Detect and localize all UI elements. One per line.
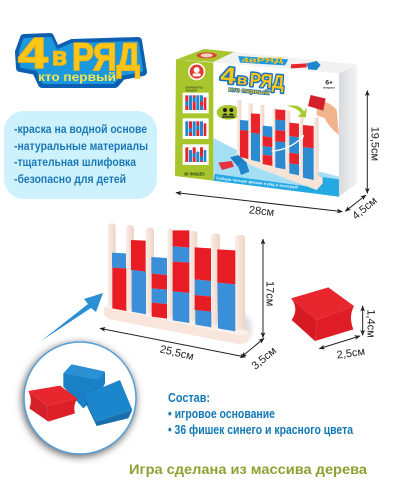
box logo: 4 <box>219 62 237 89</box>
text: features list <box>14 122 148 186</box>
box logo: кто первый <box>228 86 270 97</box>
circle with chips <box>22 342 136 457</box>
box dimensions: 4,5см <box>350 195 380 222</box>
panel: material features <box>4 111 157 199</box>
logo: 4 в ряд кто первый <box>18 29 143 84</box>
box thumbnails <box>183 85 209 176</box>
game dimensions: 25,5см <box>159 344 195 363</box>
box caption: Собери четыре фишки в ряд и выиграй! <box>216 175 299 190</box>
contents text: • 36 фишек синего и красного цвета <box>168 423 354 437</box>
contents text: Состав: <box>168 391 210 405</box>
box dimensions <box>176 91 381 222</box>
box brand badge <box>188 63 205 80</box>
product box: 4вРЯД <box>242 56 285 65</box>
box dimensions: 28см <box>248 204 275 219</box>
assembled game <box>104 223 252 344</box>
game dimensions: 17см <box>264 281 276 306</box>
chip <box>291 287 354 341</box>
red chip with dimensions: 2,5см <box>336 346 366 362</box>
red chip with dimensions: 1,4см <box>364 309 376 338</box>
box logo: в <box>236 72 248 89</box>
logo: 4 в ряд кто первый: РЯД <box>72 36 140 79</box>
red chip with dimensions <box>291 287 376 362</box>
box game illustration <box>218 100 323 190</box>
box logo <box>219 62 286 98</box>
arrow to circle <box>41 293 103 341</box>
game dimensions: 3,5см <box>250 345 279 372</box>
product box <box>175 49 357 197</box>
players badge <box>217 105 240 120</box>
age mark <box>323 80 336 89</box>
box hand with chip <box>287 95 339 135</box>
text: features list: -тщательная шлифовка <box>14 155 136 169</box>
logo: 4 в ряд кто первый: 4 <box>18 29 49 78</box>
box thumbnails: ВАРИАНТЫ <box>186 85 203 89</box>
base <box>104 304 250 344</box>
box logo: РЯД <box>249 70 285 94</box>
text: features list: -краска на водной основе <box>14 122 147 136</box>
game dimensions <box>100 239 279 372</box>
box thumbnails: ФИШЕК <box>186 89 197 93</box>
logo: 4 в ряд кто первый: кто первый <box>38 70 116 84</box>
posts <box>108 223 245 337</box>
contents text: • игровое основание <box>168 407 275 421</box>
box dimensions: 19,5см <box>369 127 381 161</box>
text: features list: -безопасно для детей <box>14 172 126 186</box>
text: features list: -натуральные материалы <box>14 139 148 153</box>
box thumbnails: 36 ФИШЕК <box>184 171 205 176</box>
age mark: 6+ <box>325 80 333 87</box>
age mark: возраст <box>323 85 336 89</box>
logo: 4 в ряд кто первый: в <box>52 43 67 71</box>
contents text <box>168 391 354 437</box>
footer caption: Игра сделана из массива дерева <box>129 462 368 477</box>
chips <box>112 230 235 331</box>
